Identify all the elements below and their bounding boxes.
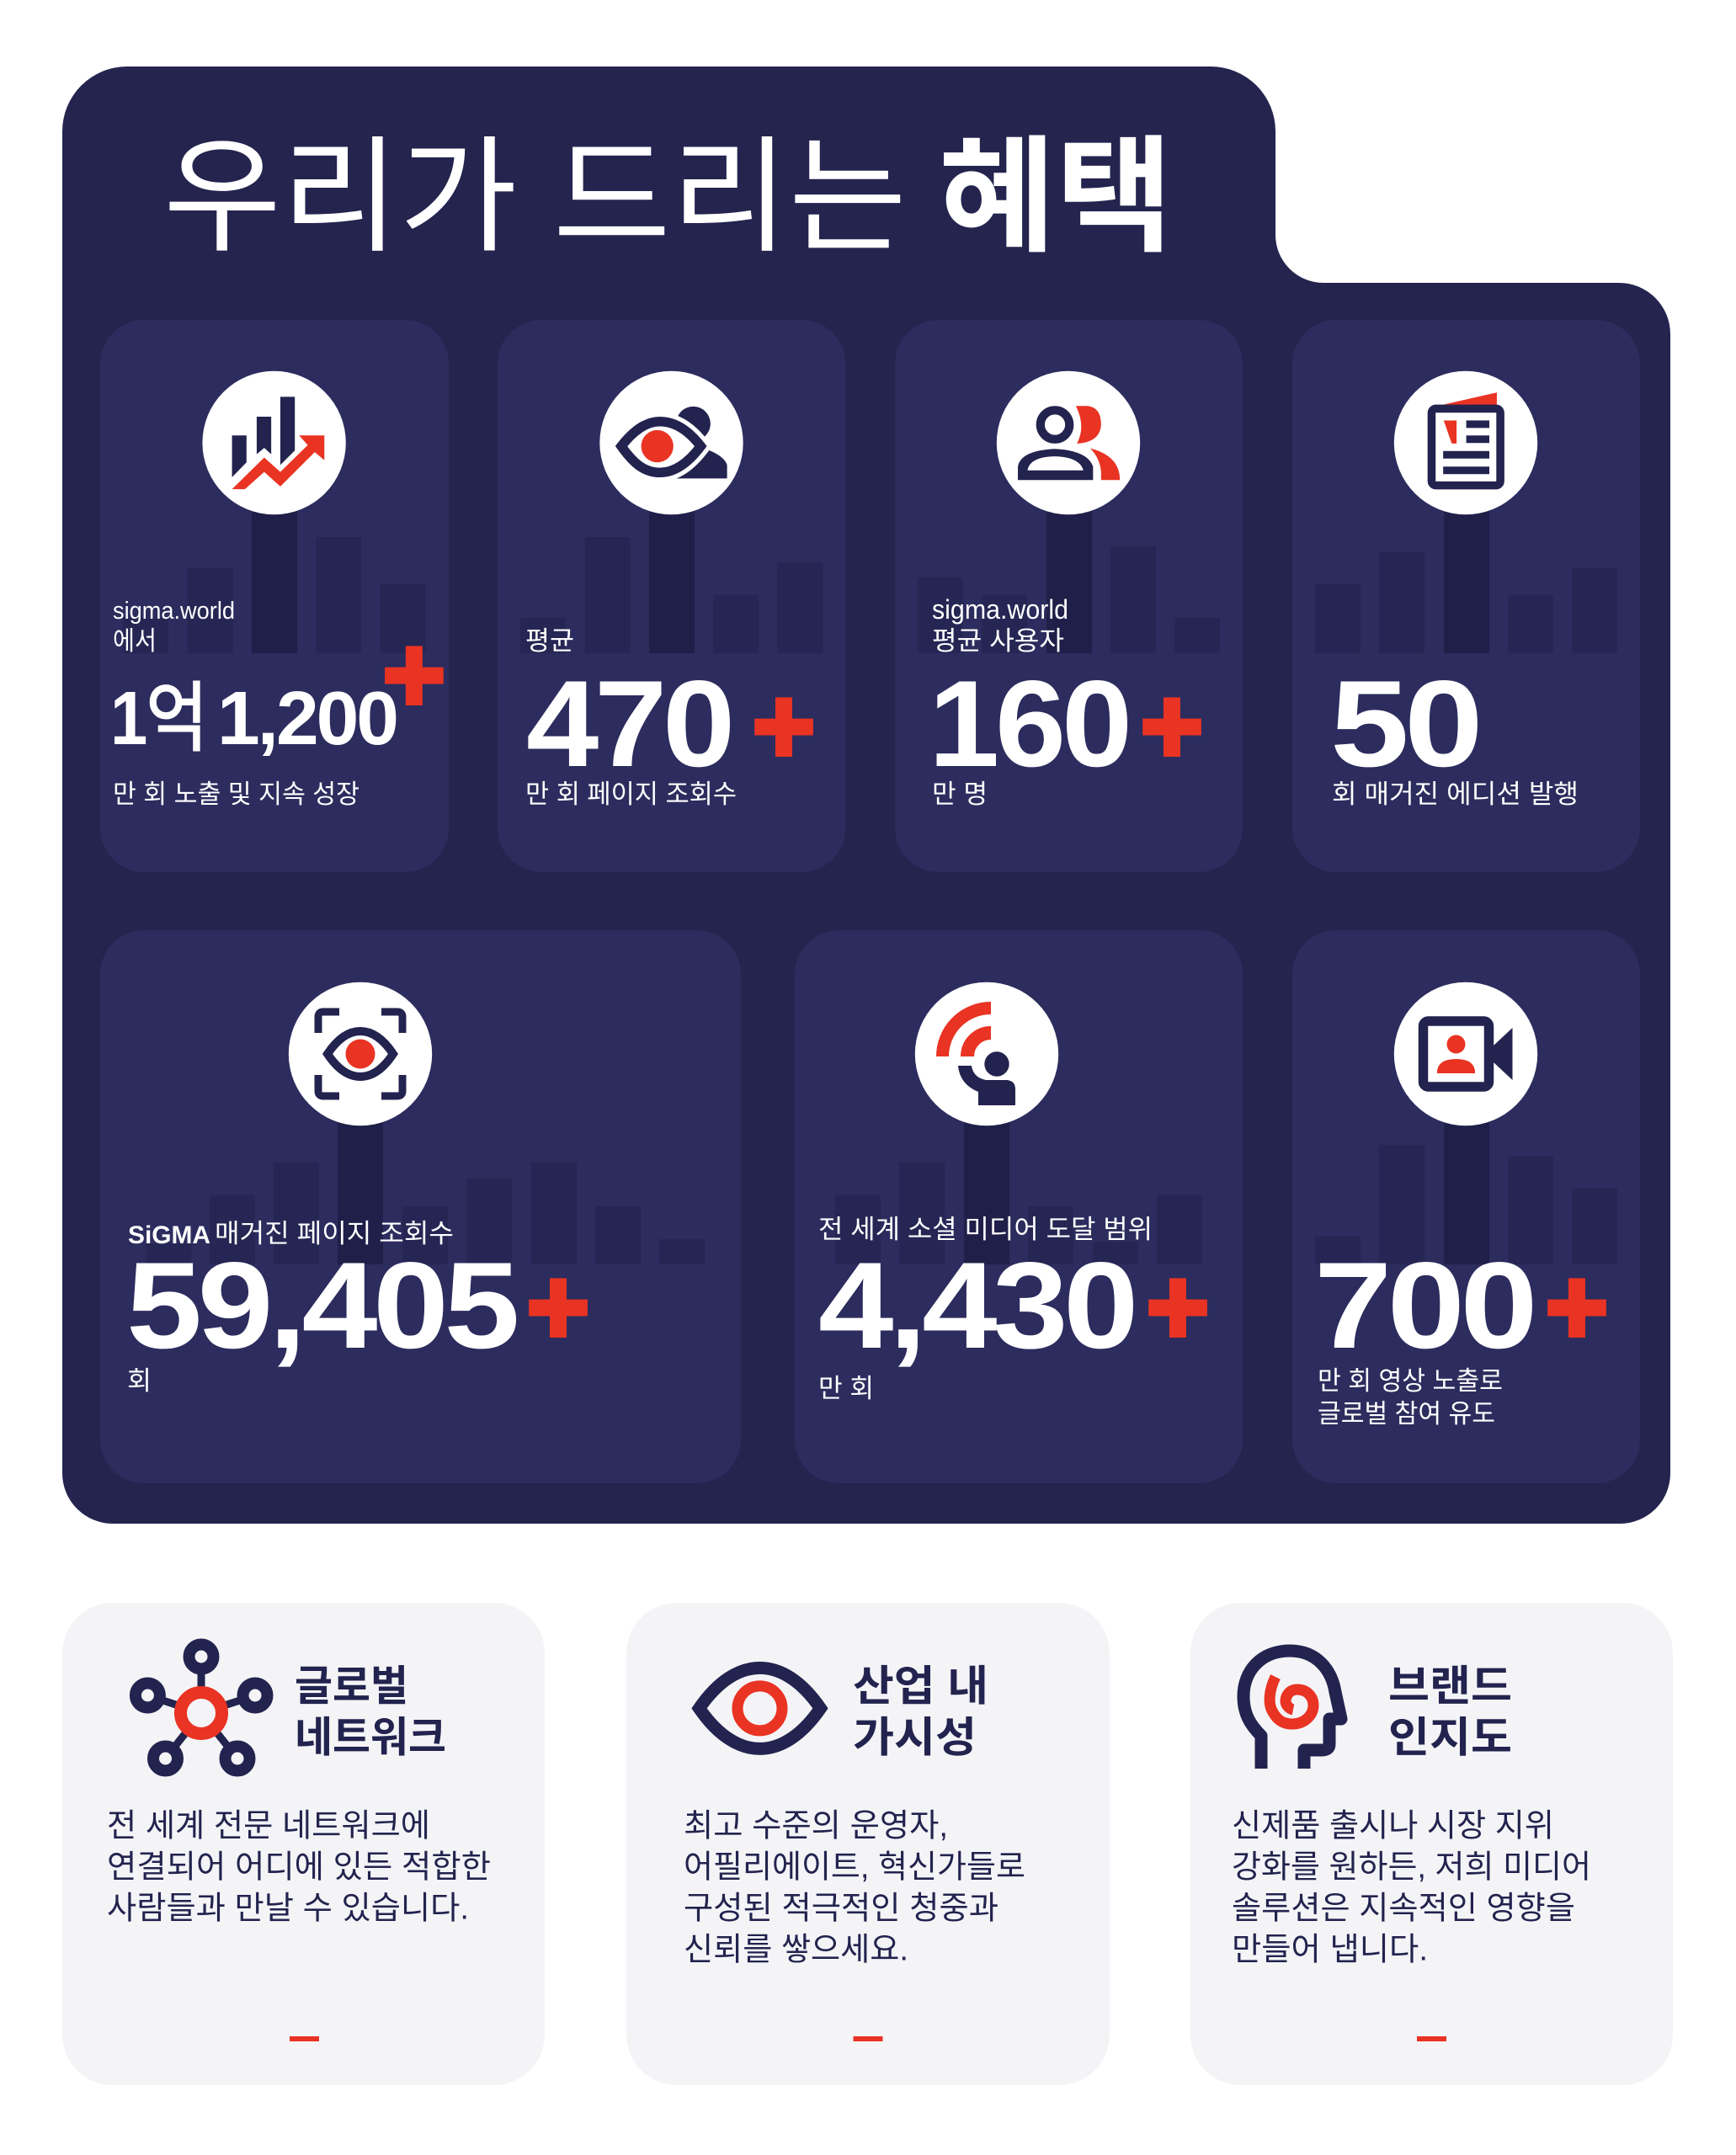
number: 470: 470: [526, 655, 731, 792]
plus sign: +: [527, 1247, 589, 1366]
plus sign: +: [1147, 1247, 1209, 1366]
heading: global network: 글로벌: [295, 1663, 408, 1710]
background bars: [123, 443, 426, 653]
label: video impressions: 글로벌 참여 유도: [1318, 1399, 1495, 1429]
heading: global network: 네트워크: [295, 1714, 446, 1761]
label: ten thousand times: 만 회: [818, 1374, 874, 1403]
plus sign: +: [753, 666, 815, 785]
plus sign: +: [1141, 666, 1203, 785]
accent dash: [1417, 2036, 1446, 2041]
label: video impressions: 만 회 영상 노출로: [1318, 1366, 1503, 1396]
text block: brand awareness description: 신제품 출시나 시장 지위: [1232, 1808, 1554, 1844]
heading: industry visibility: [853, 1663, 988, 1761]
text block: industry visibility description: 구성된 적극적인 청중과: [684, 1891, 998, 1926]
panel: stat card average users: [895, 320, 1243, 872]
label: impressions: 만 회 노출 및 지속 성장: [113, 780, 359, 809]
label: sigma.world: sigma.world: [113, 598, 235, 625]
label: sigma.world average users: [932, 594, 1068, 656]
text block: industry visibility description: 최고 수준의 운영자,: [684, 1808, 948, 1844]
panel: stat card video impressions: [1292, 930, 1640, 1483]
text block: industry visibility description: [684, 1808, 1025, 1968]
heading: industry visibility: 가시성: [853, 1714, 977, 1761]
background bars: [146, 1054, 705, 1264]
number: 1억 1,200: 1억: [110, 677, 206, 761]
label: people: 만 명: [932, 780, 988, 809]
number: 59,405: 59,405: [126, 1237, 517, 1374]
label: global social reach: 전 세계 소셜 미디어 도달 범위: [818, 1215, 1153, 1244]
background bars: [1315, 1054, 1617, 1264]
icon: eye and audience: [599, 371, 743, 514]
plus sign: +: [383, 615, 445, 734]
number: 1억 1,200: [110, 677, 397, 761]
panel: main dark benefits panel: [62, 67, 1670, 1524]
panel: stat card page views: [498, 320, 845, 872]
accent dash: [854, 2036, 882, 2041]
title: 우리가 드리는: [163, 126, 907, 268]
text block: brand awareness description: 만들어 냅니다.: [1232, 1933, 1428, 1968]
label: times: 회: [127, 1366, 152, 1396]
panel: stat card social media reach: [795, 930, 1243, 1483]
text block: industry visibility description: 어필리에이트, 혁신가들로: [684, 1850, 1025, 1886]
panel: industry visibility: [626, 1603, 1110, 2085]
icon: head with spiral: [1243, 1651, 1341, 1769]
heading: brand awareness: 인지도: [1388, 1714, 1512, 1761]
label: sigma.world average users: 평균 사용자: [932, 626, 1064, 656]
background bars: [835, 1054, 1202, 1264]
icon: newspaper: [1394, 371, 1537, 514]
label: magazine editions: 회 매거진 에디션 발행: [1332, 780, 1579, 809]
label: sigma.world average users: sigma.world: [932, 594, 1068, 625]
label: from: 에서: [113, 626, 157, 656]
icon: network hub: [136, 1645, 268, 1771]
background bars: [520, 443, 823, 653]
icon: eye scan: [289, 982, 432, 1125]
heading: global network: [295, 1663, 446, 1761]
panel: stat card magazine editions: [1292, 320, 1640, 872]
icon: eye: [699, 1668, 820, 1748]
accent dash: [290, 2036, 319, 2041]
background bars: [1315, 443, 1617, 653]
label: average: 평균: [525, 626, 574, 656]
heading: industry visibility: 산업 내: [853, 1663, 988, 1710]
panel: global network: [62, 1603, 545, 2085]
title: 혜택: [939, 126, 1173, 268]
heading: brand awareness: [1388, 1663, 1512, 1761]
text block: industry visibility description: 신뢰를 쌓으세요.: [684, 1933, 908, 1968]
text block: global network description: 연결되어 어디에 있든 적합한: [107, 1850, 491, 1886]
number: 50: 50: [1330, 655, 1478, 792]
text block: global network description: [107, 1808, 491, 1926]
text block: global network description: 사람들과 만날 수 있습니다.: [107, 1891, 469, 1926]
number: 160: 160: [929, 655, 1128, 792]
icon: rising chart: [202, 371, 346, 514]
panel: brand awareness: [1190, 1603, 1673, 2085]
number: 4,430: 4,430: [818, 1237, 1134, 1374]
icon: video camera: [1394, 982, 1537, 1125]
label: SiGMA magazine page views: 매거진 페이지 조회수: [215, 1219, 454, 1248]
text block: global network description: 전 세계 전문 네트워크에: [107, 1808, 430, 1844]
number: 1억 1,200: 1,200: [217, 677, 397, 761]
panel: stat card sigma.world impressions: [100, 320, 449, 872]
label: SiGMA magazine page views: SiGMA: [128, 1221, 210, 1249]
number: 700: 700: [1314, 1237, 1533, 1374]
icon: broadcast person: [915, 982, 1058, 1125]
heading: brand awareness: 브랜드: [1388, 1663, 1512, 1710]
icon: users: [997, 371, 1140, 514]
plus sign: +: [1546, 1247, 1608, 1366]
panel: stat card SiGMA magazine page views: [100, 930, 741, 1483]
background bars: [918, 443, 1220, 653]
label: SiGMA magazine page views: [128, 1219, 454, 1249]
label: page views: 만 회 페이지 조회수: [525, 780, 737, 809]
label: video impressions: [1318, 1366, 1503, 1429]
text block: brand awareness description: 강화를 원하든, 저희 미디어: [1232, 1850, 1591, 1886]
text block: brand awareness description: [1232, 1808, 1591, 1968]
text block: brand awareness description: 솔루션은 지속적인 영향을: [1232, 1891, 1575, 1926]
